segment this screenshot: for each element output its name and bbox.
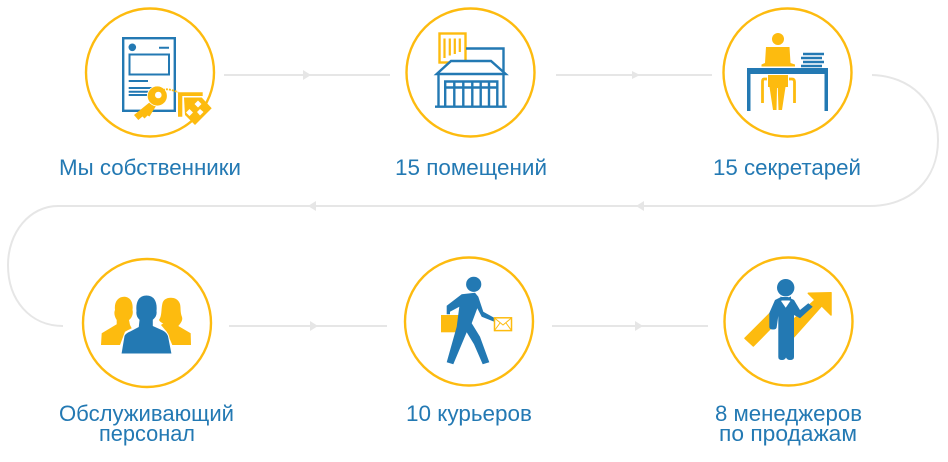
step 1: owners [59, 8, 241, 180]
circle [86, 8, 214, 136]
circle [724, 8, 852, 136]
icon: group of three people [101, 295, 191, 354]
connector path with arrows [8, 70, 938, 331]
label [59, 401, 234, 446]
label: 8 менеджеров [715, 401, 862, 426]
icon: secretary at desk [747, 33, 828, 111]
icon: courier with bag and envelope [441, 277, 512, 364]
step 2: premises [395, 8, 547, 180]
step 4: service staff [59, 259, 234, 446]
step 3: secretaries [713, 8, 861, 180]
icon: manager with rising arrow [745, 279, 831, 360]
circle [406, 8, 534, 136]
step 6: sales managers [715, 258, 862, 446]
label: Обслуживающий [59, 401, 234, 426]
label: 10 курьеров [406, 401, 532, 426]
label: 15 помещений [395, 155, 547, 180]
label: Мы собственники [59, 155, 241, 180]
icon: building [435, 34, 507, 107]
label: персонал [99, 421, 195, 446]
label: по продажам [719, 421, 857, 446]
label [715, 401, 862, 446]
circle [405, 258, 533, 386]
step 5: couriers [405, 258, 533, 426]
circle [724, 258, 852, 386]
circle [83, 259, 211, 387]
label: 15 секретарей [713, 155, 861, 180]
icon: document with key and house [123, 38, 212, 125]
